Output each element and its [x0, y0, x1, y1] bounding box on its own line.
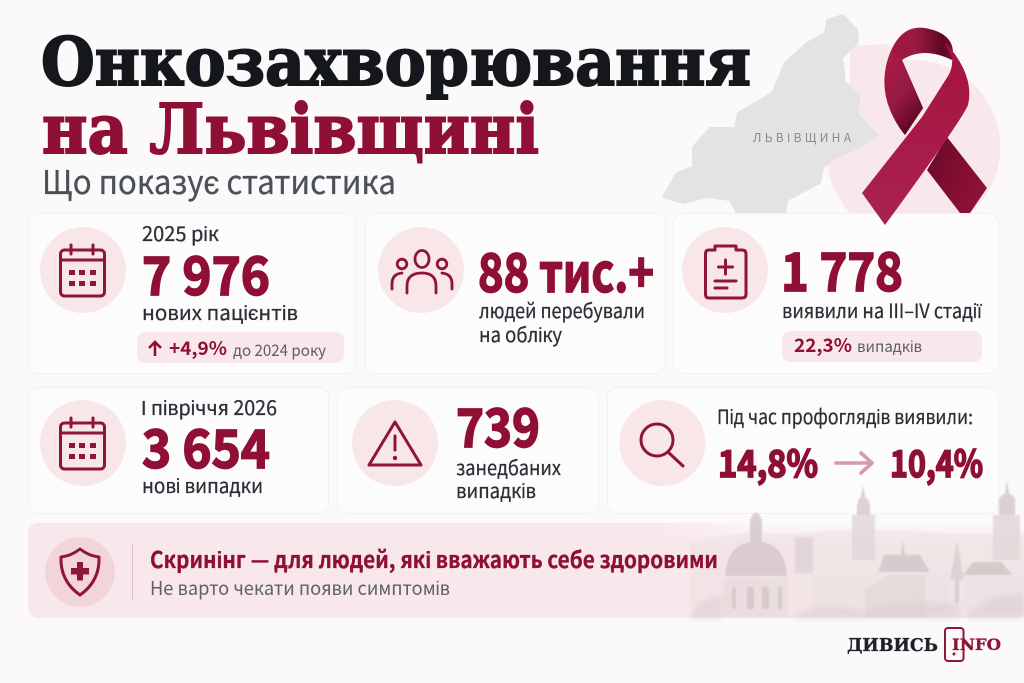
panel: 88 thousand: людей перебували — [479, 295, 645, 324]
banner: screening — [28, 480, 1024, 618]
panel: first half 2026: нові випадки — [142, 470, 263, 499]
map label: ЛЬВІВЩИНА — [753, 129, 852, 146]
ribbon front band — [862, 42, 969, 225]
pink circle behind ribbon — [827, 44, 1000, 213]
icon: warning — [352, 400, 438, 486]
panel: preventive exams: 14,8% — [718, 434, 818, 488]
panel: neglected cases: 739 — [456, 387, 540, 463]
trees — [690, 594, 1024, 618]
banner: screening: Скринінг — для людей, які вважають себе здоровими — [150, 541, 718, 575]
panel: 2025 new patients — [28, 214, 356, 374]
callout: growth: до 2024 року — [233, 337, 327, 361]
panel: stage III-IV: виявили на III–IV стадії — [782, 295, 982, 324]
icon: people — [378, 227, 464, 313]
icon: clipboard — [682, 227, 768, 313]
logo: ДИВИСЬ — [847, 635, 938, 656]
panel: neglected cases — [338, 387, 598, 514]
title — [41, 23, 751, 170]
panel: first half 2026 — [28, 388, 328, 514]
ribbon — [862, 28, 987, 225]
title: Онкозахворювання — [41, 23, 751, 101]
icon: calendar — [40, 227, 126, 313]
panel: 88 thousand: 88 тис.+ — [478, 232, 654, 308]
panel: 88 thousand — [366, 214, 666, 374]
panel: 2025 new patients: 7 976 — [142, 235, 270, 311]
callout: growth — [137, 332, 344, 363]
callout: share — [782, 331, 982, 362]
panel: preventive exams: 10,4% — [890, 434, 983, 488]
callout: growth: +4,9% — [169, 334, 227, 361]
panel: preventive exams: Під час профоглядів виявили: — [717, 401, 973, 430]
arrow — [836, 453, 872, 473]
title: на Львівщині — [42, 90, 539, 170]
icon: magnifier — [620, 400, 706, 486]
icon: calendar — [40, 400, 126, 486]
panel: first half 2026: 3 654 — [142, 408, 270, 484]
logo — [847, 628, 1001, 661]
panel: first half 2026: І півріччя 2026 — [141, 392, 277, 421]
illustration: Lviv skyline — [690, 480, 1024, 618]
panel: 2025 new patients: нових пацієнтів — [142, 297, 298, 326]
logo: INFO — [952, 635, 1001, 654]
callout: share: випадків — [857, 333, 922, 357]
panel: 2025 new patients: 2025 рік — [142, 218, 219, 247]
panel: preventive exams — [608, 388, 998, 514]
banner: screening: Не варто чекати появи симптомів — [150, 574, 450, 601]
subtitle: Що показує статистика — [42, 156, 396, 204]
ribbon back tail — [927, 137, 987, 213]
callout: share: 22,3% — [794, 331, 852, 358]
panel: neglected cases: занедбаних — [456, 452, 561, 481]
panel: stage III-IV — [674, 214, 998, 374]
ribbon loop — [884, 28, 953, 135]
map: Lviv region — [663, 15, 878, 213]
icon: shield — [45, 537, 115, 607]
panel: 88 thousand: на обліку — [479, 319, 563, 348]
panel: stage III-IV: 1 778 — [781, 231, 903, 307]
panel: neglected cases: випадків — [456, 475, 536, 504]
